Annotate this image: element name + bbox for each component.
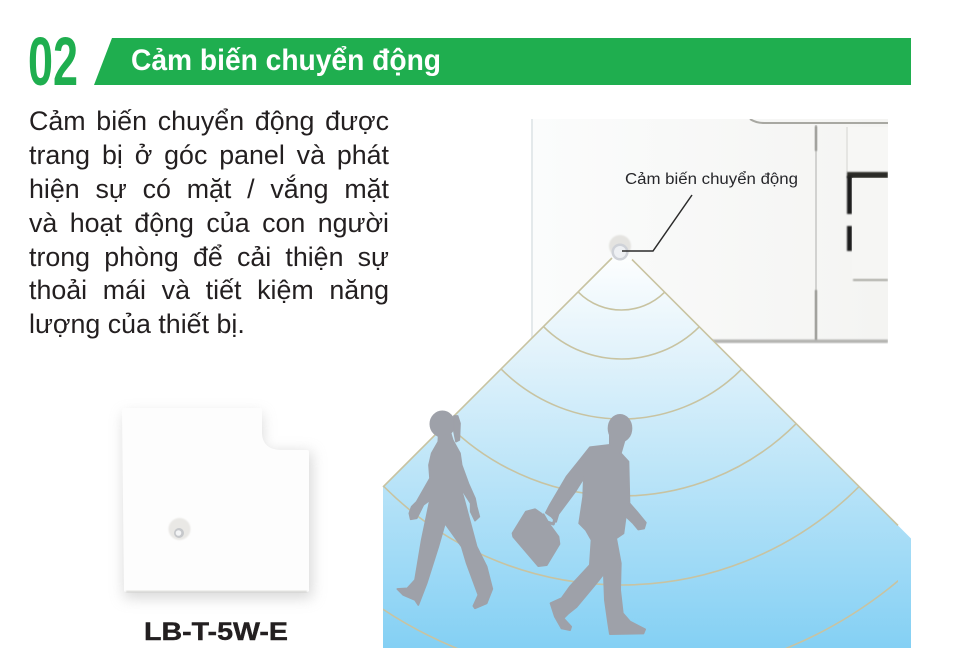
callout leader line — [622, 195, 692, 251]
detection range arcs — [383, 292, 898, 648]
body paragraph: Cảm biến chuyển động được — [29, 106, 389, 136]
body paragraph: thoải mái và tiết kiệm năng — [29, 275, 389, 305]
detection cone — [383, 292, 911, 648]
body paragraph: hiện sự có mặt / vắng mặt — [29, 174, 389, 204]
ceiling panel photo — [531, 119, 888, 343]
sensor lens on panel — [609, 235, 631, 260]
icon: sensor lens on product — [168, 518, 190, 540]
cone edges — [383, 258, 898, 526]
body paragraph — [29, 106, 389, 339]
body paragraph: và hoạt động của con người — [29, 208, 389, 238]
product photo: sensor LB-T-5W-E — [122, 408, 312, 598]
heading banner — [94, 38, 911, 85]
callout label: Cảm biến chuyển động — [625, 171, 798, 188]
silhouette: woman — [397, 411, 492, 608]
body paragraph: lượng của thiết bị. — [29, 309, 245, 339]
section number: 02 — [28, 23, 78, 100]
body paragraph: trang bị ở góc panel và phát — [29, 140, 389, 170]
silhouette: man with briefcase — [513, 415, 646, 634]
body paragraph: trong phòng để cải thiện sự — [29, 242, 389, 272]
product model label: LB-T-5W-E — [144, 618, 288, 646]
heading banner: Cảm biến chuyển động — [131, 44, 441, 77]
